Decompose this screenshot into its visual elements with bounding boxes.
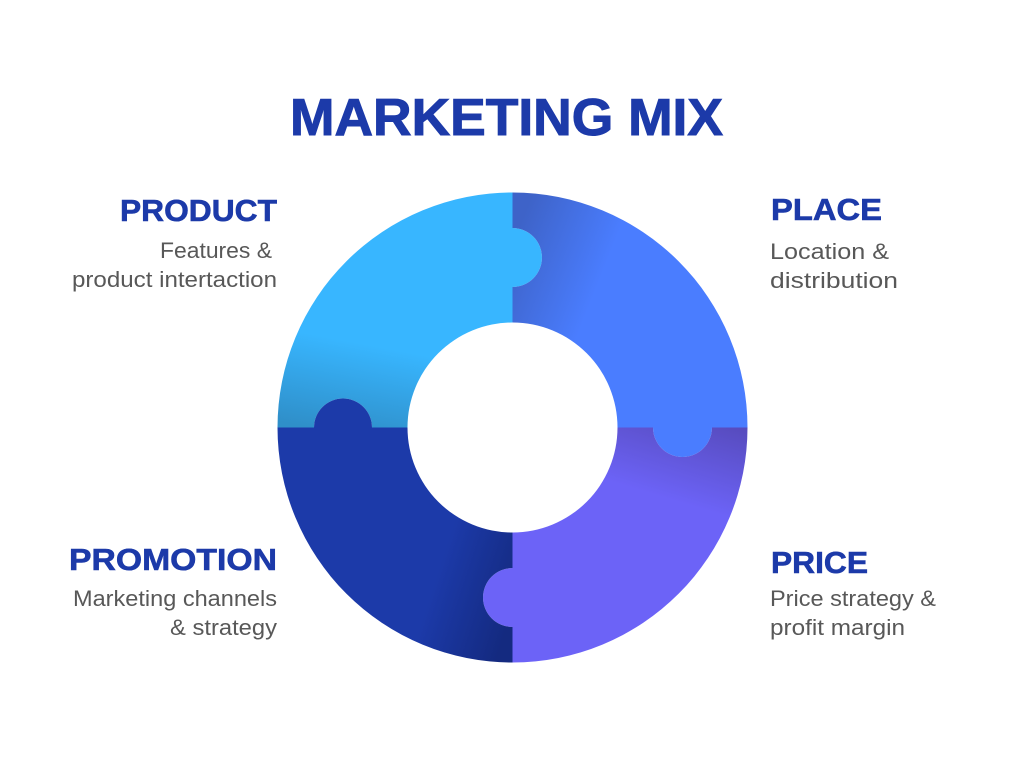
piece: promotion bbox=[278, 398, 512, 662]
piece: product bbox=[278, 192, 542, 428]
label: place bbox=[770, 192, 898, 293]
puzzle ring diagram bbox=[278, 192, 748, 662]
label: promotion bbox=[69, 542, 277, 640]
description: place: distribution bbox=[770, 268, 898, 293]
description: promotion: Marketing channels bbox=[73, 586, 277, 611]
description: price bbox=[770, 586, 936, 640]
description: product: product intertaction bbox=[72, 267, 277, 292]
label: price bbox=[770, 545, 936, 640]
heading: product: PRODUCT bbox=[120, 193, 277, 228]
heading: place: PLACE bbox=[771, 192, 882, 227]
description: price: Price strategy & bbox=[770, 586, 936, 611]
description: product: Features & bbox=[160, 238, 272, 263]
piece: price bbox=[483, 428, 748, 662]
description: place bbox=[770, 239, 898, 293]
description: promotion bbox=[73, 586, 277, 640]
label: product bbox=[72, 193, 277, 292]
title: MARKETING MIX bbox=[290, 89, 723, 147]
heading: price: PRICE bbox=[771, 545, 868, 580]
description: product bbox=[72, 238, 277, 292]
description: place: Location & bbox=[770, 239, 889, 264]
heading: promotion: PROMOTION bbox=[69, 542, 277, 577]
piece: place bbox=[512, 192, 748, 457]
description: promotion: & strategy bbox=[170, 615, 277, 640]
description: price: profit margin bbox=[770, 615, 905, 640]
